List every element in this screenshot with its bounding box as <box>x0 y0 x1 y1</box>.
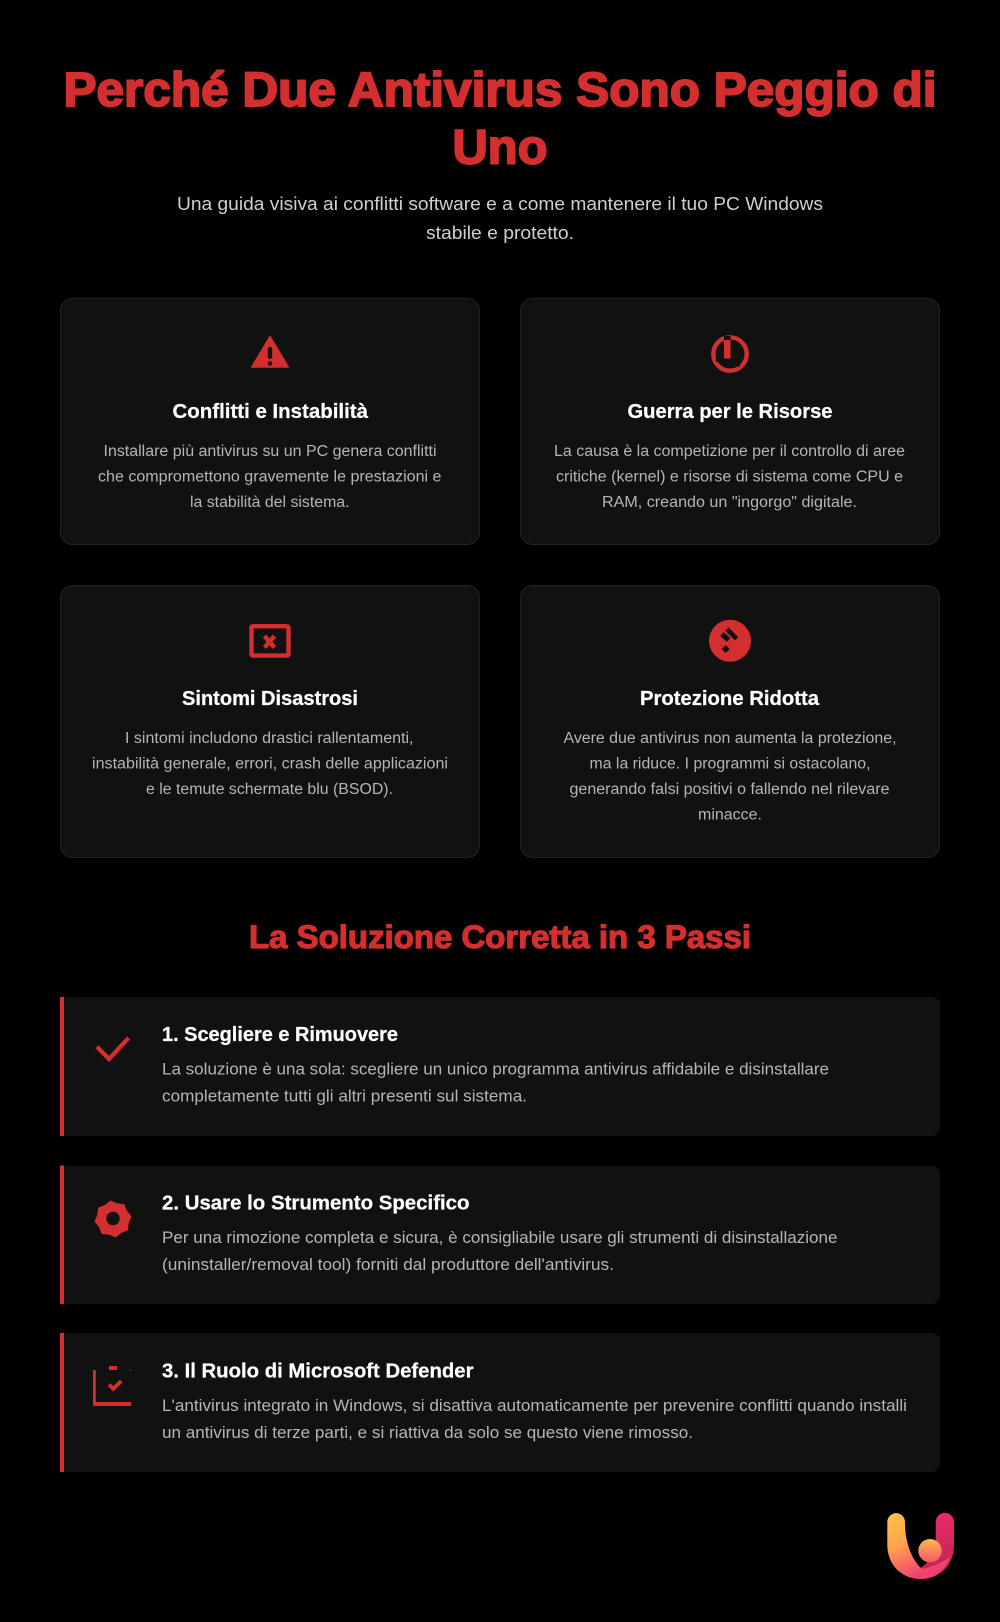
step title: 3. Il Ruolo di Microsoft Defender <box>162 1360 474 1382</box>
card text: e le temute schermate blu (BSOD). <box>146 781 393 798</box>
step title: 2. Usare lo Strumento Specifico <box>162 1192 470 1214</box>
panel: conflitti e instabilità <box>60 298 480 544</box>
card text: I sintomi includono drastici rallentamenti, <box>125 730 414 747</box>
panel: step 1 <box>60 997 940 1136</box>
logo <box>887 1513 954 1579</box>
card text: critiche (kernel) e risorse di sistema come CPU e <box>556 468 903 486</box>
step title: 1. Scegliere e Rimuovere <box>162 1024 398 1046</box>
step text: un antivirus di terze parti, e si riattiva da solo se questo viene rimosso. <box>162 1424 693 1442</box>
card text: instabilità generale, errori, crash delle applicazioni <box>92 756 448 772</box>
card text: Installare più antivirus su un PC genera conflitti <box>104 443 436 460</box>
icon: shield badge <box>709 620 751 662</box>
card text: che compromettono gravemente le prestazioni e <box>98 468 442 486</box>
card text: RAM, creando un "ingorgo" digitale. <box>602 494 857 511</box>
step text: L'antivirus integrato in Windows, si disattiva automaticamente per prevenire conflitti quando installi <box>162 1397 907 1415</box>
card title: Protezione Ridotta <box>640 688 820 710</box>
card title: Sintomi Disastrosi <box>182 688 358 710</box>
icon: warning triangle <box>252 336 288 367</box>
icon: clock gauge <box>713 336 747 371</box>
step text: completamente tutti gli altri presenti sul sistema. <box>162 1088 527 1106</box>
icon: error window <box>252 626 288 656</box>
section heading: La Soluzione Corretta in 3 Passi <box>249 919 751 955</box>
card text <box>92 730 448 798</box>
subtitle: stabile e protetto. <box>426 222 574 243</box>
step text: Per una rimozione completa e sicura, è consigliabile usare gli strumenti di disinstallazione <box>162 1229 837 1247</box>
card text: generando falsi positivi o fallendo nel rilevare <box>570 781 890 798</box>
title <box>64 63 936 174</box>
title: Perché Due Antivirus Sono Peggio di <box>64 63 936 117</box>
card title: Conflitti e Instabilità <box>172 401 369 423</box>
subtitle <box>177 193 823 243</box>
card text <box>564 730 896 824</box>
card text <box>554 443 905 511</box>
panel: sintomi disastrosi <box>60 586 480 858</box>
panel: protezione ridotta <box>520 586 940 858</box>
card text <box>98 443 442 511</box>
icon: check <box>97 1038 129 1059</box>
panel: guerra per le risorse <box>520 298 940 544</box>
card text: ma la riduce. I programmi si ostacolano, <box>590 756 870 772</box>
step text <box>162 1229 837 1274</box>
step text <box>162 1060 829 1106</box>
icon: clipboard check <box>93 1366 131 1406</box>
subtitle: Una guida visiva ai conflitti software e a come mantenere il tuo PC Windows <box>177 193 823 214</box>
card title: Guerra per le Risorse <box>628 401 832 423</box>
step text <box>162 1397 907 1442</box>
title: Uno <box>452 120 548 174</box>
step text: La soluzione è una sola: scegliere un unico programma antivirus affidabile e disinstallare <box>162 1060 829 1078</box>
icon: gear <box>93 1199 133 1239</box>
card text: Avere due antivirus non aumenta la protezione, <box>564 730 896 747</box>
panel: step 2 <box>60 1166 940 1304</box>
step text: (uninstaller/removal tool) forniti dal produttore dell'antivirus. <box>162 1256 614 1274</box>
panel: step 3 <box>60 1333 940 1472</box>
card text: minacce. <box>698 806 762 824</box>
card text: la stabilità del sistema. <box>190 494 350 511</box>
card text: La causa è la competizione per il controllo di aree <box>554 443 905 460</box>
